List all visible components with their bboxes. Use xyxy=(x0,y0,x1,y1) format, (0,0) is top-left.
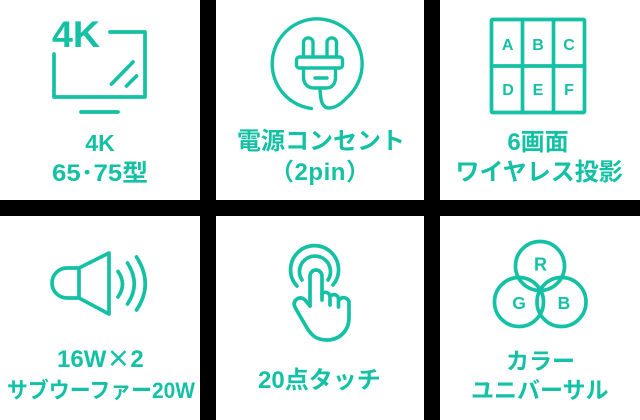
label: 4K 65・75型 xyxy=(52,130,148,187)
icon: RGB circles xyxy=(494,242,586,326)
label: 6画面 ワイヤレス投影: 6画面 xyxy=(507,129,569,156)
icon: six-pane grid: F xyxy=(564,82,574,99)
icon: six-pane grid: D xyxy=(502,82,514,99)
label: 電源コンセント (2pin): 電源コンセント xyxy=(237,128,405,155)
icon: six-pane grid: E xyxy=(533,82,544,99)
icon: six-pane grid xyxy=(492,20,584,112)
icon: 4K monitor: 4K xyxy=(52,14,100,55)
label: 6画面 ワイヤレス投影: ワイヤレス投影 xyxy=(456,159,623,186)
label: カラー ユニバーサル: ユニバーサル xyxy=(471,377,609,403)
label: 4K 65・75型: 65･75型 xyxy=(52,160,148,187)
label: 16W×2 サブウーファー20W: 16W×2 xyxy=(57,339,144,374)
label: 電源コンセント (2pin) xyxy=(237,128,405,186)
label: 4K 65・75型: 4K xyxy=(85,130,115,156)
icon: RGB circles: B xyxy=(558,293,570,313)
panel: 6-screen wireless projection xyxy=(440,0,640,200)
label: 電源コンセント (2pin): （2pin） xyxy=(270,159,370,186)
panel: 20-point touch xyxy=(216,216,424,420)
icon: six-pane grid: B xyxy=(532,37,544,54)
icon: touch hand xyxy=(291,246,349,340)
icon: speaker with sound waves xyxy=(52,253,145,314)
panel: 4K xyxy=(0,0,200,200)
label: 6画面 ワイヤレス投影 xyxy=(456,129,623,186)
label: 20点タッチ: 20点タッチ xyxy=(258,367,381,394)
label: カラー ユニバーサル: カラー xyxy=(506,348,575,374)
icon: plug xyxy=(272,19,362,108)
icon: six-pane grid: A xyxy=(502,37,514,54)
panel: power outlet xyxy=(216,0,424,200)
label: 16W×2 サブウーファー20W: サブウーファー20W xyxy=(7,378,195,403)
icon: RGB circles: G xyxy=(512,293,526,313)
icon: RGB circles: R xyxy=(534,254,547,274)
label: カラー ユニバーサル xyxy=(471,348,609,403)
icon: six-pane grid: C xyxy=(563,37,575,54)
icon: 4K monitor xyxy=(52,14,145,112)
panel: color universal xyxy=(440,216,640,420)
panel: speakers xyxy=(0,216,200,420)
label: 16W×2 サブウーファー20W xyxy=(7,339,195,403)
